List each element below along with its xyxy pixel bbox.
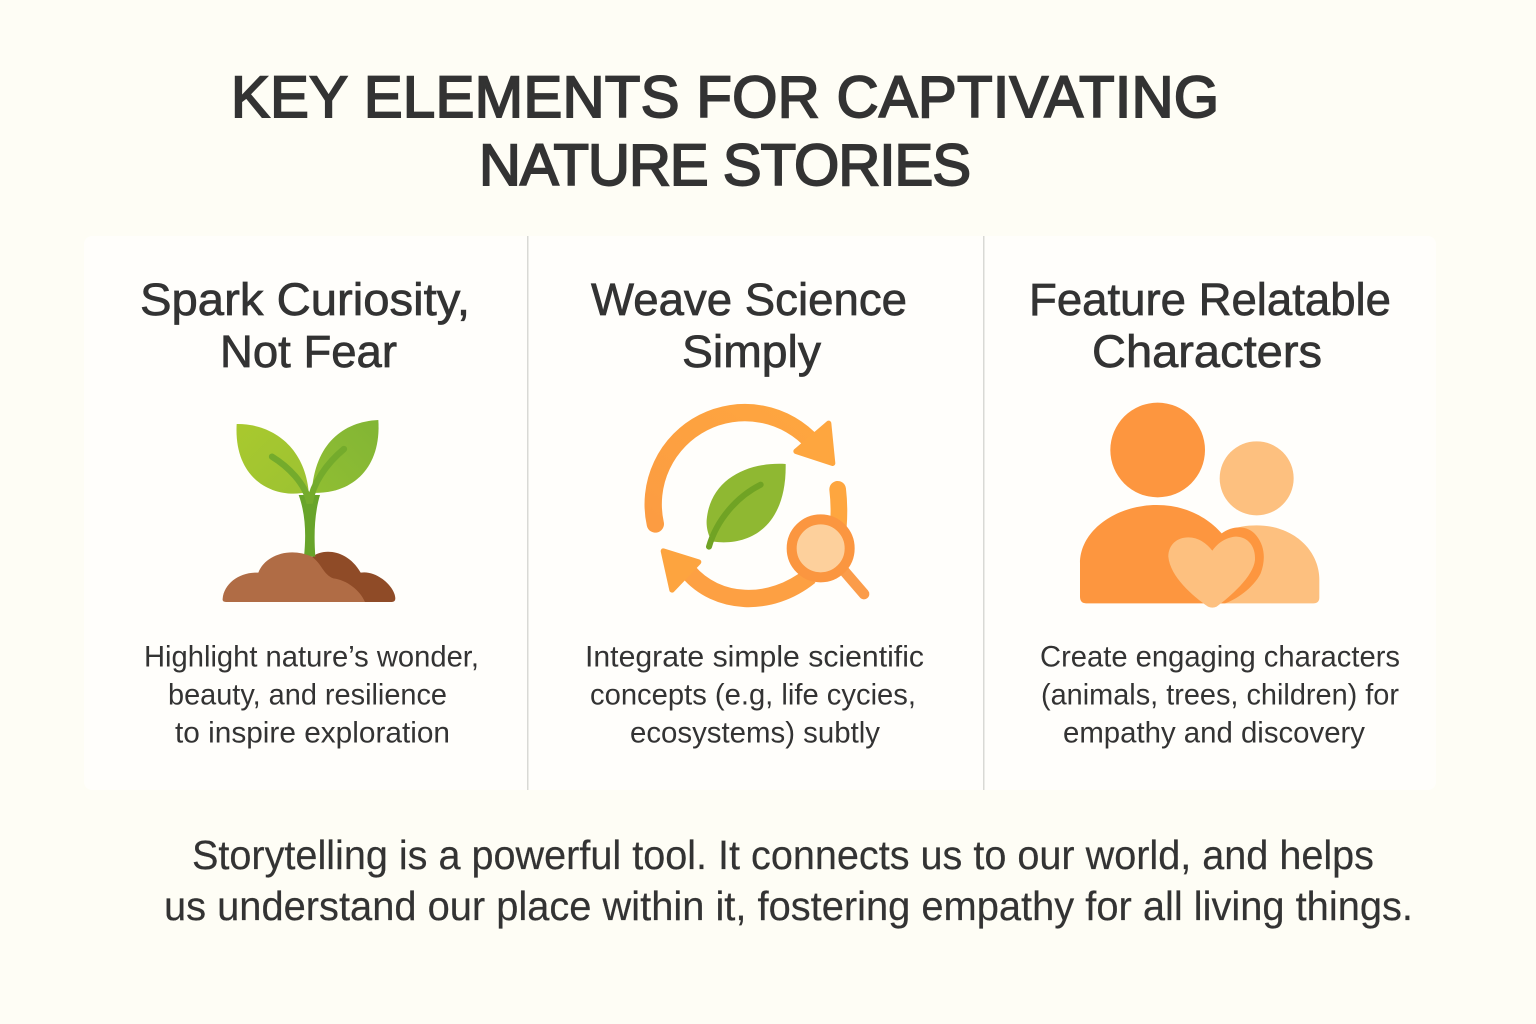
panel: relatable characters xyxy=(1029,274,1400,750)
heading: relatable characters: Characters xyxy=(1092,326,1322,377)
heading: spark curiosity: Spark Curiosity, xyxy=(140,274,470,325)
heading: weave science xyxy=(591,274,907,377)
title xyxy=(231,65,1219,198)
closing statement: Storytelling is a powerful tool. It connects us to our world, and helps xyxy=(192,832,1374,878)
description: weave science: concepts (e.g, life cycies, xyxy=(590,678,916,712)
description: relatable characters: (animals, trees, children) for xyxy=(1041,678,1399,712)
title: KEY ELEMENTS FOR CAPTIVATING xyxy=(231,65,1219,130)
heading: relatable characters: Feature Relatable xyxy=(1029,274,1391,325)
icon: two people with heart xyxy=(1080,403,1319,608)
panel: three columns card xyxy=(84,236,1436,790)
description: spark curiosity xyxy=(144,640,479,750)
description: relatable characters xyxy=(1040,640,1400,750)
description: spark curiosity: Highlight nature’s wonder, xyxy=(144,640,479,674)
panel: weave science xyxy=(585,274,924,750)
icon: sprout in soil xyxy=(223,420,395,602)
title: NATURE STORIES xyxy=(479,133,971,198)
closing statement: us understand our place within it, fostering empathy for all living things. xyxy=(164,883,1413,929)
heading: relatable characters xyxy=(1029,274,1391,377)
description: relatable characters: empathy and discovery xyxy=(1063,716,1365,750)
heading: weave science: Simply xyxy=(682,326,822,377)
panel: spark curiosity xyxy=(140,274,479,750)
description: spark curiosity: beauty, and resilience xyxy=(168,678,447,712)
description: relatable characters: Create engaging characters xyxy=(1040,640,1400,674)
description: weave science xyxy=(585,640,924,750)
heading: weave science: Weave Science xyxy=(591,274,907,325)
description: weave science: ecosystems) subtly xyxy=(630,716,880,750)
heading: spark curiosity xyxy=(140,274,470,377)
description: spark curiosity: to inspire exploration xyxy=(175,716,450,750)
icon: cycle arrows with leaf and magnifier xyxy=(653,413,864,599)
description: weave science: Integrate simple scientific xyxy=(585,640,924,674)
closing statement xyxy=(164,832,1413,929)
heading: spark curiosity: Not Fear xyxy=(220,326,397,377)
